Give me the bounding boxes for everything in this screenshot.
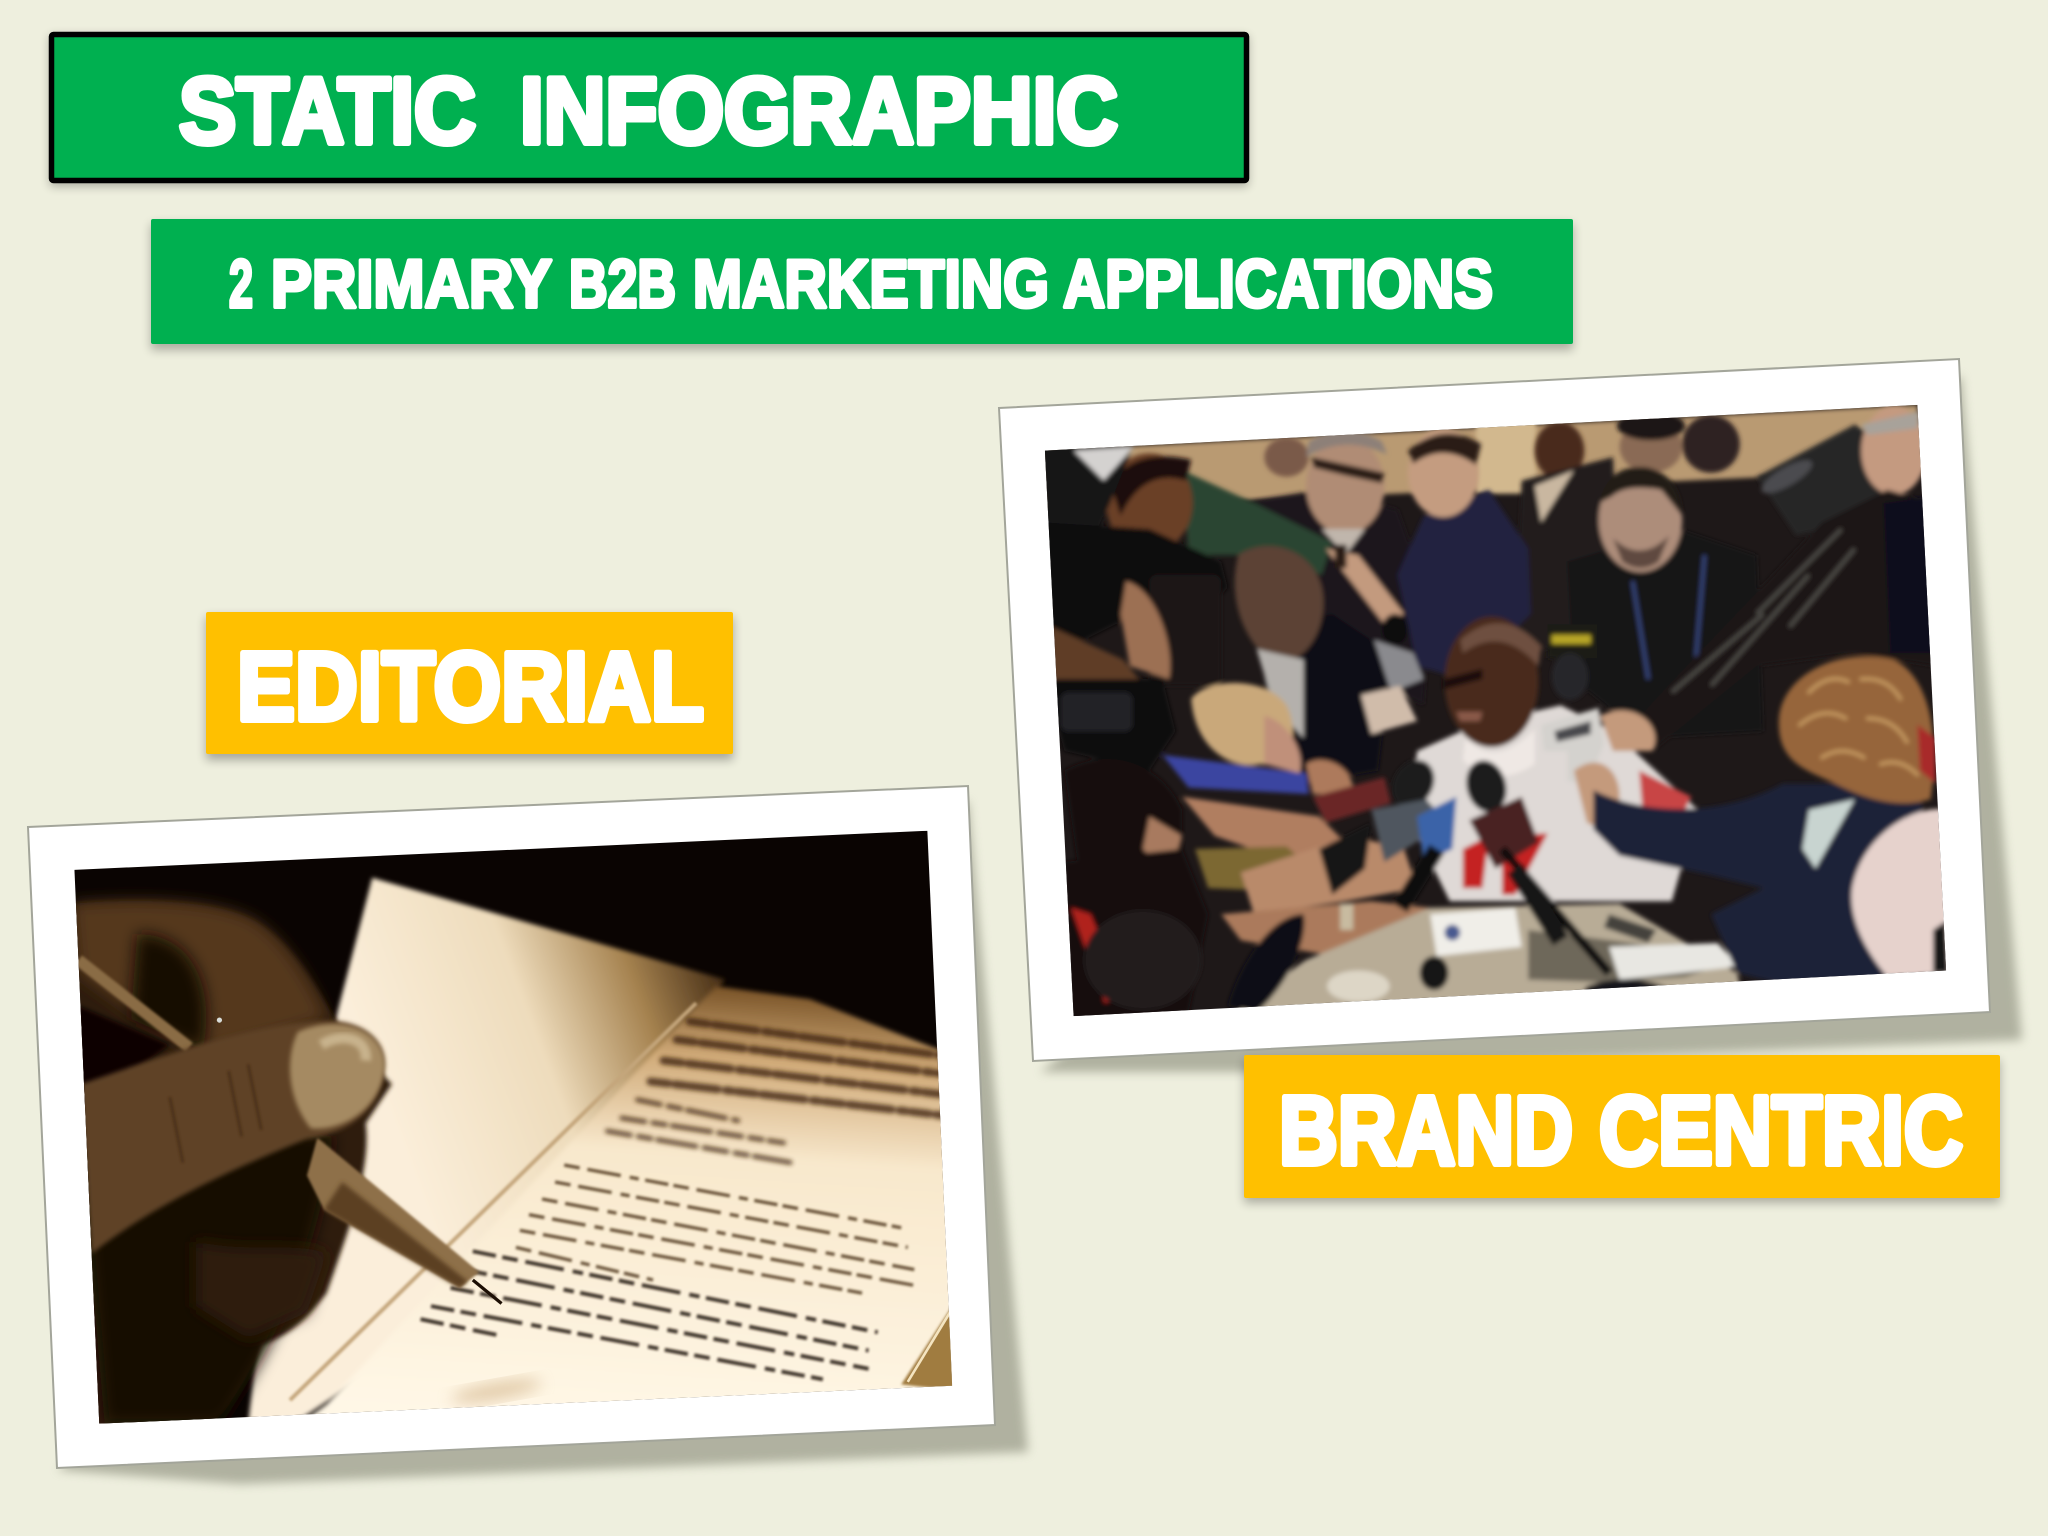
handwriting upper block	[607, 1021, 943, 1162]
pen	[78, 960, 189, 1048]
title banner: INFOGRAPHIC	[520, 58, 1118, 163]
label: brand centric: BRAND	[1279, 1076, 1573, 1185]
table	[1238, 900, 1743, 1008]
black man left, green sleeve	[1182, 470, 1332, 575]
label: brand centric	[1244, 1055, 2000, 1203]
wall	[1045, 405, 1920, 509]
man navy jacket	[1398, 490, 1531, 679]
leather jacket arm	[1633, 490, 1936, 751]
photo card: press conference	[999, 359, 2022, 1072]
navy coat reporter	[1593, 784, 1940, 986]
subtitle banner: PRIMARY	[271, 246, 552, 322]
arms	[1177, 794, 1346, 858]
man black jacket smiling	[1567, 529, 1763, 738]
camera top right	[1757, 424, 1894, 536]
left page	[248, 878, 725, 1424]
red strap right	[1917, 725, 1936, 784]
bald head bottom right	[1852, 809, 1954, 977]
photo: reporters around a football player	[1032, 392, 1959, 1032]
blurred paper glow	[450, 1375, 543, 1407]
label: brand centric: CENTRIC	[1599, 1076, 1963, 1185]
microphones	[1384, 752, 1443, 815]
player jersey	[1408, 705, 1698, 901]
player head	[1445, 616, 1539, 747]
subtitle banner: MARKETING	[693, 246, 1049, 322]
man with glasses	[1241, 490, 1430, 705]
title banner	[50, 34, 1248, 186]
subtitle banner: B2B	[569, 246, 676, 322]
photo card: writing in a notebook	[28, 786, 1028, 1484]
white recorder	[1541, 708, 1604, 784]
hand holding recorder	[1600, 710, 1655, 751]
label: editorial	[206, 612, 733, 760]
handwriting lower block	[516, 1165, 921, 1293]
yellow mic	[1548, 634, 1574, 652]
balding man	[1260, 614, 1391, 784]
left photographers	[1045, 679, 1176, 771]
hand	[72, 901, 392, 1430]
subtitle banner	[151, 219, 1573, 350]
left cameras & hair	[1045, 522, 1228, 640]
title banner: STATIC	[179, 58, 476, 163]
right page	[300, 986, 960, 1424]
subtitle banner: APPLICATIONS	[1063, 246, 1493, 322]
thumb	[81, 1021, 385, 1254]
subtitle banner: 2	[229, 246, 253, 322]
background crowd	[1038, 406, 1954, 1032]
curly hair	[1779, 656, 1934, 803]
top-left camera	[1045, 446, 1134, 527]
arm with watch reaching mic	[1326, 549, 1404, 624]
blonde reporter	[1162, 755, 1309, 794]
label: editorial: EDITORIAL	[237, 632, 704, 741]
photo: hand writing with pen	[74, 830, 952, 1424]
